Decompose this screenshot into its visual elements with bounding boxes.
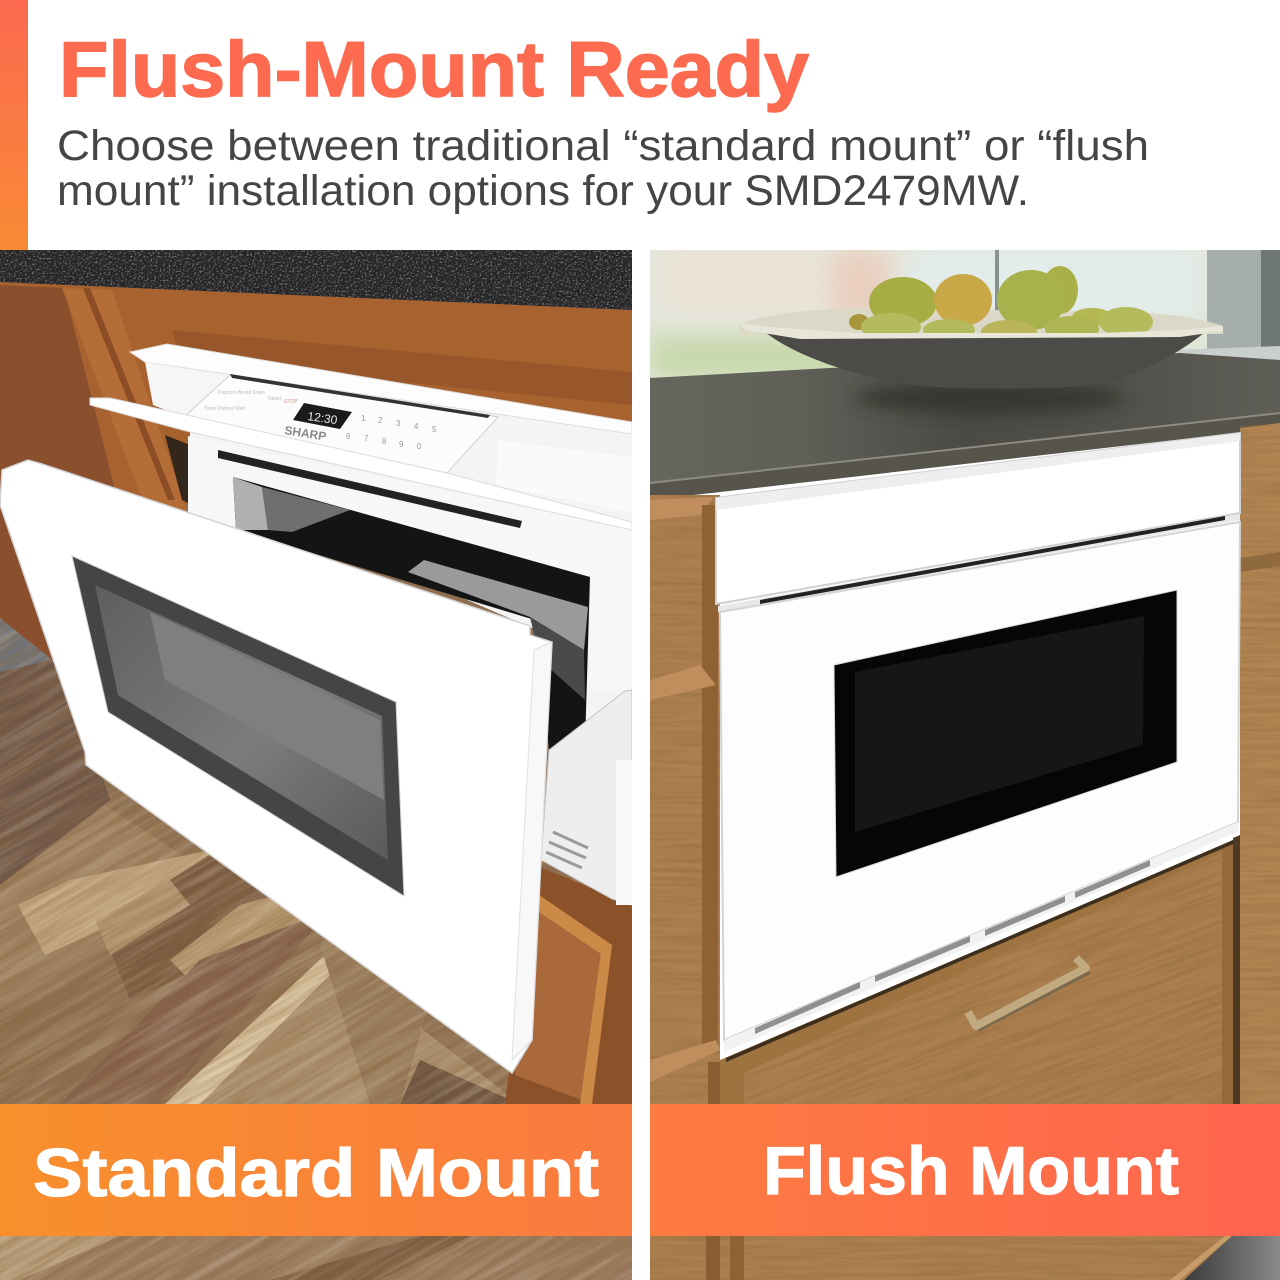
drawer handle — [968, 958, 1090, 1030]
banner: standard mount: Standard Mount — [33, 1135, 599, 1211]
open drawer door — [0, 460, 552, 1073]
lower drawer — [720, 835, 1240, 1104]
oven door — [720, 522, 1240, 1052]
subtitle — [57, 122, 1149, 215]
lower cabinet door — [505, 865, 632, 1104]
control panel: 12:30 — [307, 409, 339, 427]
title: Flush-Mount Ready — [59, 25, 809, 113]
control panel: SHARP — [284, 423, 327, 444]
control panel: Reset — [268, 396, 282, 402]
drawer interior — [233, 477, 590, 750]
photo: flush mount installation — [650, 250, 1280, 1280]
oven top panel — [716, 433, 1240, 612]
control panel: 7 — [364, 434, 369, 443]
control panel: STOP — [284, 399, 298, 405]
side cabinets — [650, 423, 1280, 1104]
control panel: 8 — [382, 437, 387, 446]
subtitle: Choose between traditional “standard mount” or “flush — [57, 122, 1149, 170]
control panel: 6 — [346, 432, 351, 441]
below banner — [650, 1236, 1280, 1280]
counter top — [650, 353, 1280, 500]
control panel: 4 — [414, 422, 419, 431]
oven window — [834, 590, 1177, 877]
control panel: 1 — [361, 414, 366, 423]
drawer side bracket — [541, 690, 632, 905]
oven body — [128, 344, 632, 721]
control panel: 5 — [432, 425, 437, 434]
subtitle: mount” installation options for your SMD2479MW. — [57, 167, 1029, 215]
accent bar — [0, 0, 28, 250]
banner: flush mount: Flush Mount — [763, 1133, 1179, 1209]
front trim strip and slot — [90, 398, 632, 530]
banner: standard mount — [0, 1104, 632, 1236]
control panel: 2 — [378, 416, 383, 425]
counter top — [0, 250, 632, 310]
control panel — [184, 374, 498, 473]
window background — [650, 250, 1280, 380]
photo: standard mount installation — [0, 250, 632, 1280]
floor planks — [0, 610, 632, 1280]
control panel: 0 — [417, 442, 422, 451]
upper cabinet — [0, 282, 632, 670]
control panel: Popcorn Bread Oven — [218, 390, 265, 396]
fruit bowl — [740, 266, 1223, 389]
banner: flush mount — [650, 1104, 1280, 1236]
control panel: Timer Defrost Melt — [204, 406, 246, 412]
control panel: 3 — [396, 419, 401, 428]
control panel: 9 — [399, 440, 404, 449]
